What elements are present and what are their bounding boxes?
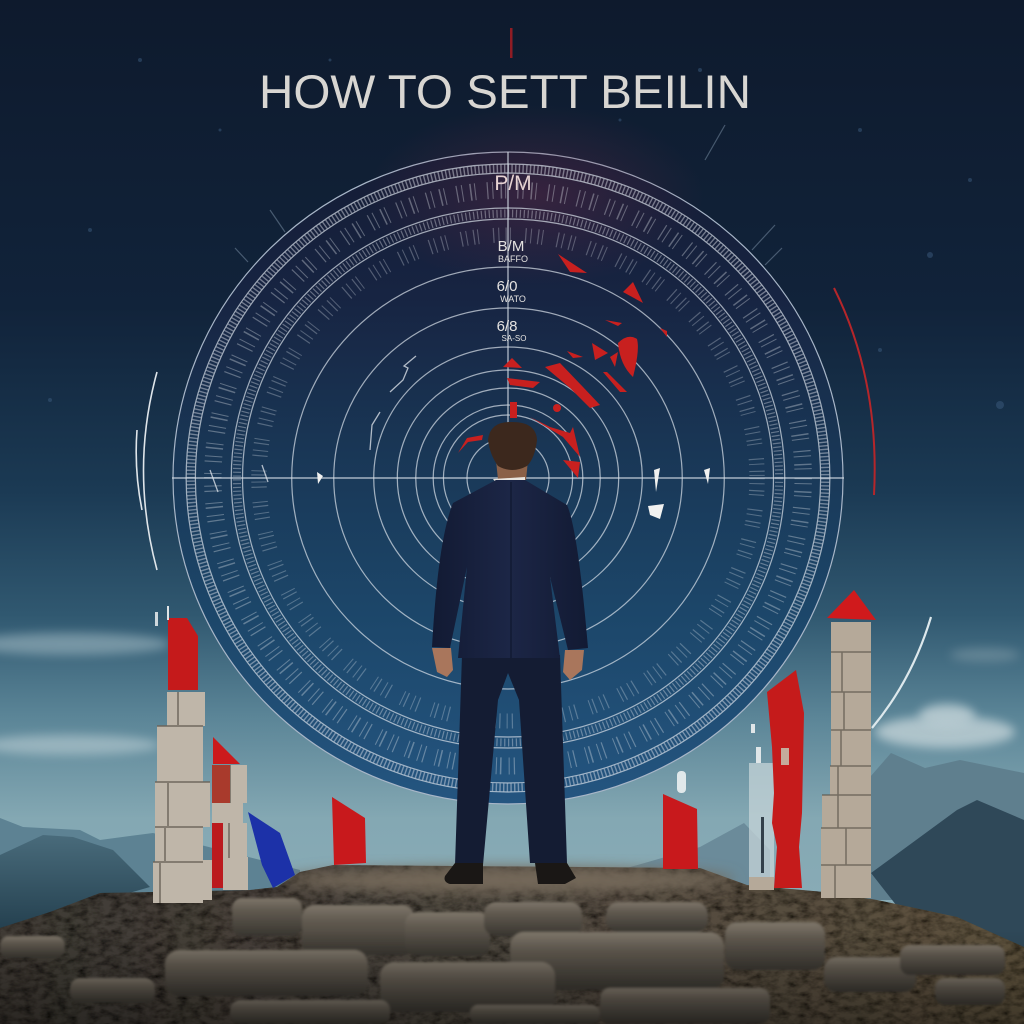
radial chart: [172, 105, 844, 804]
red banner: [168, 618, 198, 690]
tick rings: [191, 168, 825, 788]
block seams: [821, 652, 871, 898]
back seam: [510, 482, 512, 658]
rock shading: [0, 930, 1024, 1024]
outer tick marks: [235, 125, 782, 265]
left tower: [153, 606, 248, 903]
red flag right: [663, 794, 698, 869]
blocks: [153, 692, 248, 903]
neck and ears: [494, 440, 530, 480]
clouds: [0, 633, 1020, 755]
red arc right: [834, 288, 875, 495]
shoes: [445, 863, 483, 884]
trousers: [455, 655, 567, 865]
block seams: [153, 692, 230, 903]
red roof: [827, 590, 876, 620]
red marks: [458, 254, 667, 478]
ring labels: SA-SO: [502, 334, 526, 343]
left hand: [432, 648, 453, 677]
purple glow: [365, 105, 705, 285]
crosshair axes: [172, 152, 844, 480]
white arc right: [872, 617, 931, 728]
red triangle: [213, 737, 240, 764]
plateau highlight: [285, 867, 735, 893]
red crumpled pillar: [767, 670, 804, 888]
chart disc: [173, 152, 843, 804]
mountains: [0, 753, 1024, 950]
ring labels: 6/0: [497, 278, 517, 295]
right towers: [677, 590, 876, 898]
right hand: [563, 650, 584, 680]
left outer arcs: [136, 372, 157, 570]
stone steps: [0, 898, 1005, 1024]
title: HOW TO SETT BEILIN: [259, 65, 751, 118]
rock base: [0, 865, 1024, 1024]
ring labels: BAFFO: [498, 254, 528, 264]
ring labels: WATO: [500, 294, 526, 304]
ring labels: B/M: [498, 238, 524, 255]
blue flag: [248, 812, 295, 888]
ring labels: [494, 172, 532, 343]
white marks: [317, 468, 710, 519]
red tick above title: [510, 28, 512, 58]
small flags: [248, 794, 698, 888]
glass pillar: [749, 763, 774, 885]
red flag left: [332, 797, 366, 865]
ring labels: P/M: [494, 172, 532, 195]
jacket: [432, 480, 588, 658]
collar: [493, 477, 525, 483]
ring labels: 6/8: [497, 318, 517, 335]
man: [432, 422, 588, 884]
hair: [488, 422, 537, 470]
stacked blocks: [821, 622, 871, 898]
scribbles: [210, 356, 416, 492]
background specks: [48, 58, 1004, 409]
